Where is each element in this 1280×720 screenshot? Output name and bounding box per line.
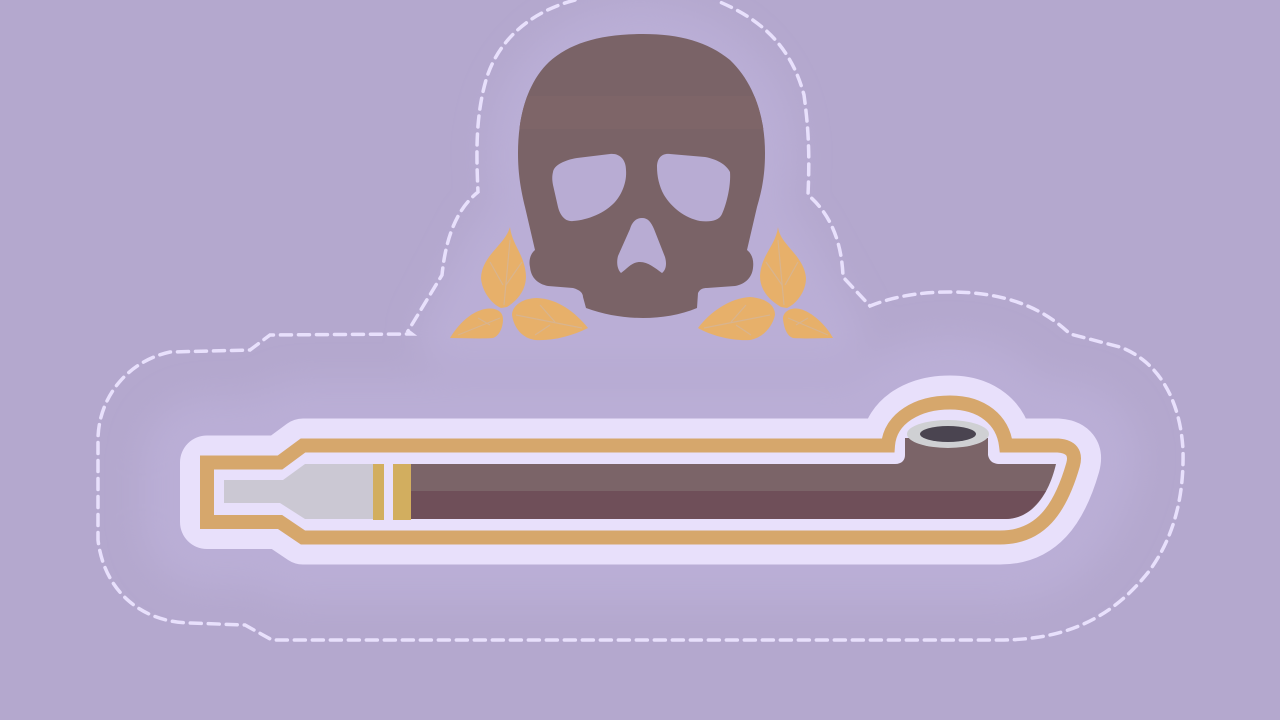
pipe gold outline — [207, 402, 1074, 538]
sticker halo — [207, 34, 1074, 538]
pipe mouthpiece — [224, 464, 380, 519]
illustration: skull over tobacco pipe sticker — [96, 0, 1185, 642]
mouthpiece gold bands — [373, 464, 411, 520]
pipe stem and bowl — [411, 438, 1056, 519]
pipe bowl rim — [907, 420, 989, 448]
dashed cut line — [98, 0, 1183, 640]
pipe — [207, 402, 1074, 538]
tobacco leaves: right cluster — [698, 227, 833, 340]
tobacco leaves: left cluster — [450, 227, 588, 340]
pipe white outline — [207, 402, 1074, 538]
skull — [510, 34, 775, 318]
